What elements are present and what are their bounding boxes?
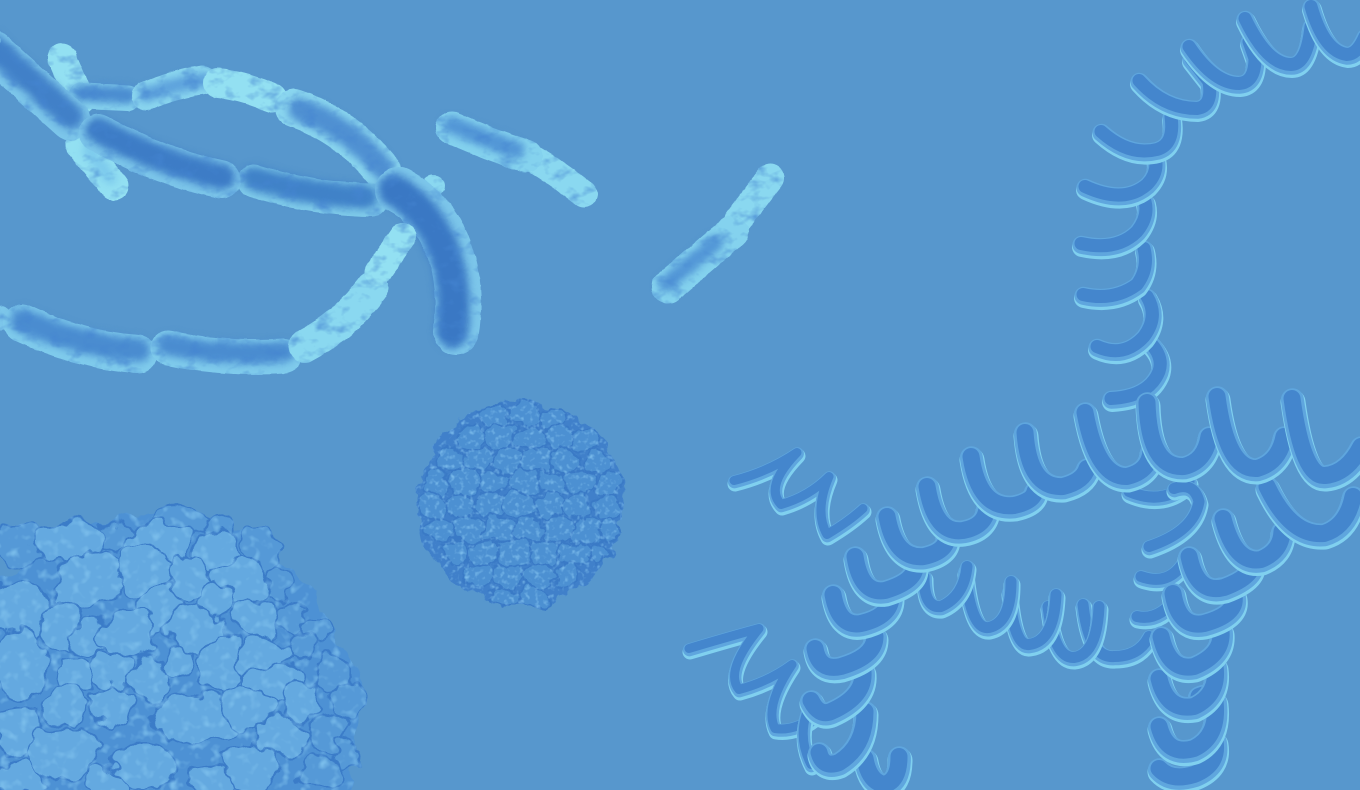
lower segment four <box>378 236 403 272</box>
pale rod top left <box>62 58 80 100</box>
pale stub behind big rod <box>432 175 434 197</box>
bacillus chain: upper left <box>0 46 458 357</box>
segment to crossing <box>294 108 382 170</box>
thin rod <box>82 93 128 98</box>
head <box>666 232 732 287</box>
bacillus rod: centre top <box>452 125 584 194</box>
pale tail <box>738 178 770 220</box>
pale tail <box>535 160 584 194</box>
spirochete: lower left <box>689 628 815 768</box>
big rod <box>394 190 458 332</box>
head <box>452 125 526 156</box>
virus: small round <box>418 400 624 607</box>
pale segment <box>218 83 272 98</box>
spirochete: top right <box>1081 6 1360 402</box>
fading segment <box>254 178 372 200</box>
segment <box>146 80 203 96</box>
dark segment <box>98 130 222 180</box>
bacillus rod: short diagonal <box>666 178 770 287</box>
spirochete: lower right pile back coils <box>1129 482 1200 621</box>
lower segment one <box>22 320 138 354</box>
spirochete: right column <box>1159 486 1354 780</box>
inner lumps <box>0 520 320 790</box>
spirochete: main long chain <box>811 396 1360 788</box>
virus: large round <box>0 504 361 790</box>
outer lumps <box>0 504 361 790</box>
spirochete: small chain left <box>734 452 864 538</box>
pale rod lower <box>80 145 114 186</box>
dark rod top left <box>0 46 70 120</box>
spirochete: middle chain <box>924 566 1150 661</box>
lower segment two <box>168 345 284 357</box>
lower segment three <box>305 288 372 346</box>
